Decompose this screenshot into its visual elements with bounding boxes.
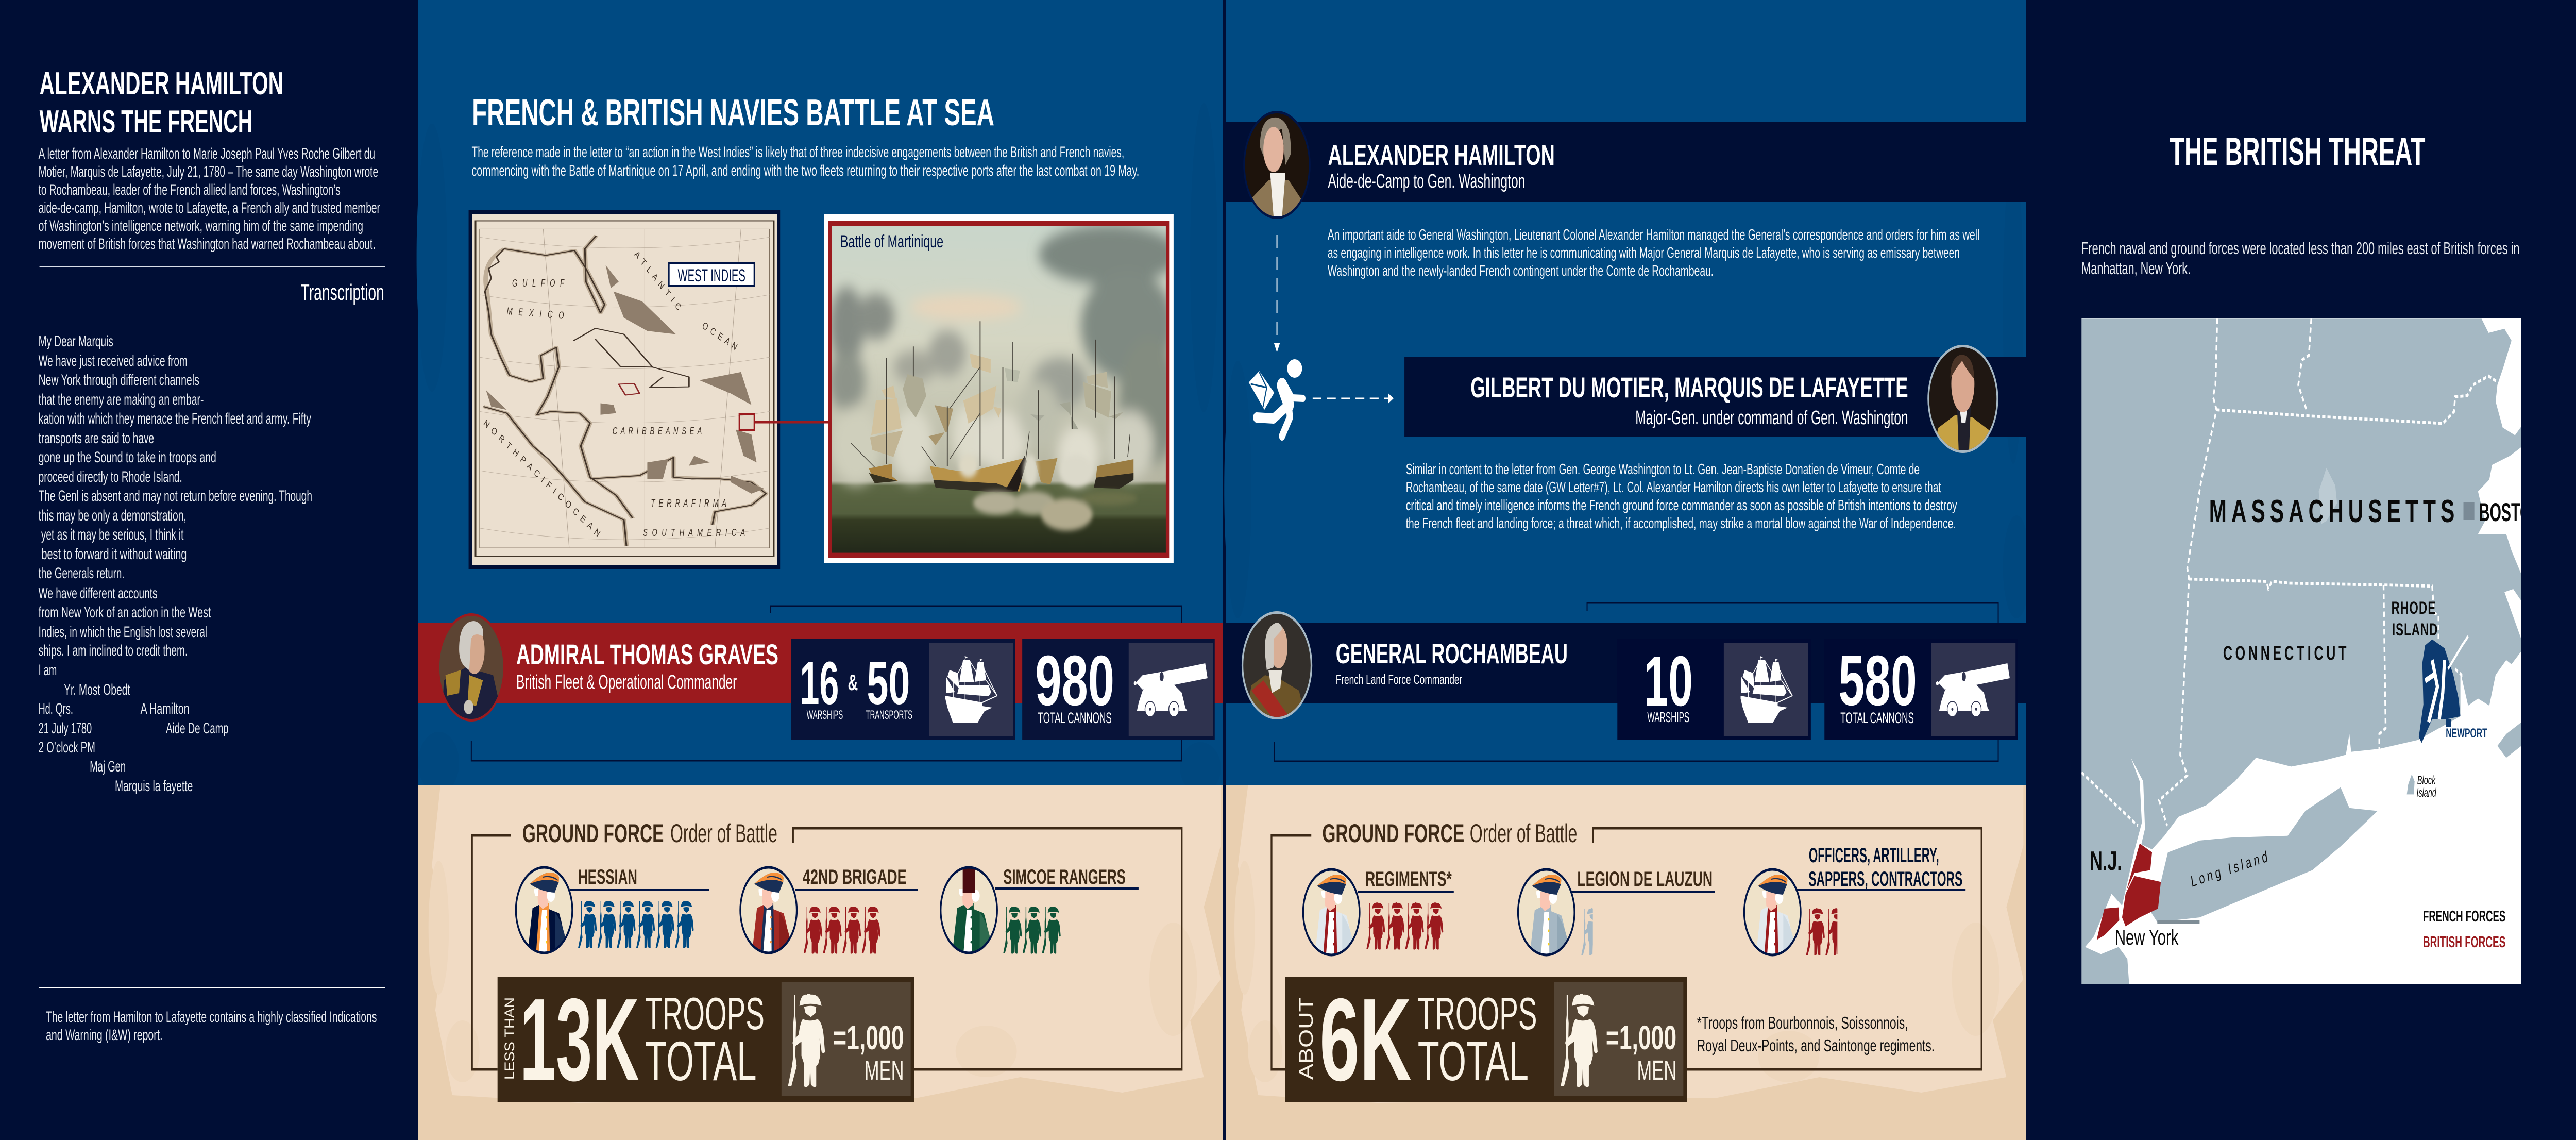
- total troops box: TROOPS: [1418, 988, 1537, 1039]
- total troops box: 6K: [1319, 974, 1412, 1105]
- antique map of the West Indies: S O U T H A M E R I C A: [643, 527, 745, 539]
- unit: Hessian: [516, 866, 709, 954]
- name: GENERAL ROCHAMBEAU: [1336, 638, 1568, 669]
- stat: warships and transports: 16: [800, 649, 839, 717]
- letter transcription: Yr. Most Obedt: [64, 681, 130, 698]
- intro text: The reference made in the letter to “an action in the West Indies” is likely that of three indecisive engagements between the British and French navies,: [472, 144, 1124, 161]
- letter transcription: best to forward it without waiting: [42, 546, 187, 563]
- panel: the British threat: [2026, 0, 2576, 1140]
- Lafayette description: Rochambeau, of the same date (GW Letter#7), Lt. Col. Alexander Hamilton directs his own letter to Lafayette to ensure that: [1406, 479, 1941, 496]
- intro text: movement of British forces that Washington had warned Rochambeau about.: [39, 236, 376, 253]
- painting: Battle of Martinique: [824, 214, 1179, 563]
- arrow: courier to Lafayette: [1313, 393, 1394, 404]
- I&W note: and Warning (I&W) report.: [46, 1027, 163, 1044]
- letter transcription: the Generals return.: [39, 565, 125, 582]
- center divider: [1223, 0, 1226, 1140]
- arrow: down to courier: [1274, 235, 1280, 353]
- stat: warships and transports: WARSHIPS: [807, 709, 843, 722]
- icon: officer uniform: [1744, 869, 1801, 957]
- state borders: [2081, 318, 2497, 826]
- stat: total cannons: TOTAL CANNONS: [1038, 710, 1112, 727]
- intro text: [472, 144, 1139, 179]
- map: New England: BOSTON: [2479, 498, 2542, 527]
- intro text: Motier, Marquis de Lafayette, July 21, 1780 – The same day Washington wrote: [39, 163, 378, 180]
- unit: 42nd Brigade: 42ND BRIGADE: [803, 866, 907, 888]
- intro text: of Washington’s intelligence network, warning him of the same impending: [39, 217, 363, 234]
- intro text: aide-de-camp, Hamilton, wrote to Lafayette, a French ally and trusted member: [39, 199, 380, 216]
- name: ALEXANDER HAMILTON: [1328, 139, 1555, 172]
- Hamilton description: Washington and the newly-landed French contingent under the Comte de Rochambeau.: [1328, 263, 1714, 279]
- Hamilton description: as engaging in intelligence work. In this letter he is communicating with Major General Marquis de Lafayette, who is serving as emissary between: [1328, 245, 1960, 261]
- unit: Legion de Lauzun: [1518, 868, 1715, 957]
- transcription heading: Transcription: [300, 279, 384, 305]
- map: New England: NEWPORT: [2446, 727, 2487, 741]
- panel: the messengers and French forces: [1224, 0, 2030, 785]
- panel heading: FRENCH & BRITISH NAVIES BATTLE AT SEA: [472, 92, 994, 133]
- stat: total cannons: [1824, 639, 2018, 740]
- ground force heading: Order of Battle: [670, 819, 777, 848]
- antique map of the West Indies: O C E A N: [701, 320, 738, 353]
- antique map of the West Indies: T E R R A F I R M A: [651, 497, 726, 509]
- letter transcription: A Hamilton: [141, 700, 190, 717]
- heading: [40, 66, 283, 140]
- icon: Hessian uniform: [516, 867, 572, 954]
- total troops box: LESS THAN: [502, 997, 517, 1080]
- letter transcription: We have different accounts: [39, 585, 158, 602]
- role: British Fleet & Operational Commander: [516, 671, 737, 693]
- intro text: to Rochambeau, leader of the French allied land forces, Washington’s: [39, 181, 341, 198]
- legend: FRENCH FORCES: [2423, 907, 2505, 925]
- banner: Admiral Thomas Graves: [418, 613, 1223, 722]
- map: New England: Block: [2417, 774, 2436, 787]
- map: New England: Long Island: [2190, 848, 2268, 891]
- Lafayette description: the French fleet and landing force; a threat which, if accomplished, may strike a mortal blow against the War of Independence.: [1406, 515, 1956, 532]
- total troops box: =1,000: [833, 1018, 904, 1057]
- frame bracket: [471, 606, 1182, 761]
- ships: [870, 354, 1123, 457]
- icon: regiment uniform: [1303, 869, 1360, 957]
- letter transcription: Marquis la fayette: [115, 778, 193, 795]
- map: New England: New York: [2115, 925, 2179, 949]
- unit: Regiments: REGIMENTS*: [1365, 868, 1452, 891]
- unit: officers, artillery, sappers, contractors: OFFICERS, ARTILLERY,: [1809, 844, 1939, 867]
- role: French Land Force Commander: [1336, 672, 1462, 687]
- intro text: commencing with the Battle of Martinique on 17 April, and ending with the two fleets returning to their respective ports after the last combat on 19 May.: [472, 162, 1139, 179]
- icon: ship: [945, 656, 997, 723]
- regiments footnote: [1697, 1013, 1935, 1055]
- legend: BRITISH FORCES: [2423, 933, 2505, 951]
- painting caption: Battle of Martinique: [840, 232, 943, 252]
- total troops box: [498, 974, 914, 1105]
- Lafayette description: [1406, 461, 1957, 532]
- letter transcription: this may be only a demonstration,: [39, 507, 187, 524]
- intro text: A letter from Alexander Hamilton to Marie Joseph Paul Yves Roche Gilbert du: [39, 145, 375, 162]
- map labels: N.J.: [2090, 846, 2122, 876]
- heading: WARNS THE FRENCH: [40, 104, 252, 140]
- letter transcription: The Genl is absent and may not return before evening. Though: [39, 488, 312, 505]
- letter transcription: My Dear Marquis: [39, 333, 113, 350]
- letter transcription: proceed directly to Rhode Island.: [39, 468, 182, 485]
- icon: Simcoe Rangers uniform: [941, 866, 997, 954]
- panel: French ground force: [1226, 785, 2026, 1140]
- banner: Lafayette: [1404, 345, 2026, 454]
- letter transcription: New York through different channels: [39, 372, 199, 389]
- unit: officers, artillery, sappers, contractors: SAPPERS, CONTRACTORS: [1808, 868, 1962, 891]
- banner: General Rochambeau: [1226, 611, 2026, 722]
- total troops box: MEN: [1637, 1055, 1676, 1086]
- I&W note: [46, 1009, 377, 1044]
- icon: running courier with letters: [1249, 359, 1303, 436]
- panel: British ground force: [418, 785, 1223, 1140]
- map labels: RHODE: [2392, 598, 2435, 618]
- I&W note: The letter from Hamilton to Lafayette contains a highly classified Indications: [46, 1009, 377, 1026]
- unit: Legion de Lauzun: LEGION DE LAUZUN: [1577, 868, 1713, 891]
- panel: French & British navies battle at sea: [417, 0, 1223, 794]
- Lafayette description: critical and timely intelligence informs the French ground force commander as soon as possible of British intentions to destroy: [1406, 497, 1957, 514]
- antique map of the West Indies: N O R T H P A C I F I C O C E A N: [482, 417, 601, 540]
- Rhode Island: French forces: [2419, 636, 2468, 743]
- antique map of the West Indies: A T L A N T I C: [633, 248, 683, 313]
- frame bracket: [1274, 603, 1998, 761]
- antique map of the West Indies: G U L F O F: [512, 277, 565, 289]
- regiments footnote: Royal Deux-Points, and Saintonge regiments.: [1697, 1036, 1935, 1055]
- regiments footnote: *Troops from Bourbonnois, Soissonnois,: [1697, 1013, 1908, 1032]
- total troops box: TOTAL: [645, 1030, 757, 1093]
- letter transcription: transports are said to have: [39, 430, 154, 447]
- description: Manhattan, New York.: [2081, 259, 2191, 278]
- Hamilton description: An important aide to General Washington, Lieutenant Colonel Alexander Hamilton managed the General’s correspondence and orders for him as well: [1328, 227, 1979, 243]
- role: Aide-de-Camp to Gen. Washington: [1328, 170, 1525, 192]
- stat: warships and transports: &: [848, 669, 858, 695]
- unit: officers, artillery, sappers, contractors: [1744, 844, 1965, 957]
- letter transcription: Aide De Camp: [166, 720, 229, 737]
- total troops box: [1285, 974, 1687, 1105]
- description: French naval and ground forces were located less than 200 miles east of British forces in: [2081, 239, 2519, 258]
- stat: total cannons: 580: [1838, 641, 1917, 720]
- heading: THE BRITISH THREAT: [2170, 130, 2426, 174]
- portrait: Rochambeau: [1242, 611, 1312, 722]
- map labels: MASSACHUSETTS: [2209, 494, 2454, 529]
- portrait: Hamilton: [1243, 111, 1311, 219]
- total troops box: 13K: [520, 974, 639, 1105]
- unit: Simcoe Rangers: SIMCOE RANGERS: [1003, 866, 1126, 888]
- stat: warships and transports: 50: [867, 649, 910, 717]
- map labels: ISLAND: [2392, 620, 2437, 640]
- letter transcription: 21 July 1780: [39, 720, 92, 737]
- letter transcription: 2 O’clock PM: [39, 739, 95, 756]
- letter transcription: Hd. Qrs.: [39, 700, 73, 717]
- stat: warships: WARSHIPS: [1647, 710, 1689, 726]
- ground force heading: GROUND FORCE: [1322, 819, 1464, 848]
- letter transcription: [39, 333, 312, 795]
- total troops box: MEN: [865, 1055, 904, 1086]
- total troops box: TROOPS: [645, 988, 765, 1039]
- unit: Hessian: HESSIAN: [578, 866, 637, 888]
- letter transcription: that the enemy are making an embar-: [39, 391, 204, 408]
- stat: warships and transports: TRANSPORTS: [866, 709, 912, 722]
- letter transcription: Maj Gen: [90, 758, 126, 775]
- letter transcription: gone up the Sound to take in troops and: [39, 449, 216, 466]
- stat: total cannons: [1022, 639, 1215, 740]
- letter transcription: Indies, in which the English lost several: [39, 624, 207, 641]
- New York region: British forces: [2097, 844, 2161, 940]
- name: ADMIRAL THOMAS GRAVES: [516, 639, 778, 671]
- letter transcription: ships. I am inclined to credit them.: [39, 642, 188, 659]
- Lafayette description: Similar in content to the letter from Gen. George Washington to Lt. Gen. Jean-Baptiste Donatien de Vimeur, Comte de: [1406, 461, 1920, 478]
- letter transcription: kation with which they menace the French fleet and army. Fifty: [39, 410, 311, 427]
- connector from map to painting: [739, 414, 828, 430]
- stat: total cannons: TOTAL CANNONS: [1840, 710, 1914, 727]
- unit: 42nd Brigade: [740, 866, 918, 954]
- icon: soldier equals 1,000 men: [1561, 994, 1598, 1087]
- West Indies label: WEST INDIES: [678, 266, 745, 286]
- panel: Alexander Hamilton warns the French: [39, 66, 385, 1044]
- map: New England: Island: [2416, 786, 2436, 800]
- map: New England: [2081, 318, 2542, 984]
- description: [2081, 239, 2519, 278]
- ground force heading: GROUND FORCE: [522, 819, 664, 848]
- name: GILBERT DU MOTIER, MARQUIS DE LAFAYETTE: [1470, 372, 1908, 404]
- banner: Alexander Hamilton: [1226, 111, 2026, 219]
- portrait: Lafayette: [1927, 345, 1998, 454]
- letter transcription: We have just received advice from: [39, 353, 188, 370]
- total troops box: ABOUT: [1295, 997, 1317, 1080]
- role: Major-Gen. under command of Gen. Washington: [1635, 407, 1908, 428]
- map labels: [2090, 494, 2454, 876]
- ground force heading: [1322, 819, 1577, 848]
- stat: warships: 10: [1644, 641, 1693, 721]
- stat: total cannons: 980: [1035, 641, 1114, 720]
- unit: Regiments: [1303, 868, 1454, 957]
- heading: ALEXANDER HAMILTON: [40, 66, 283, 102]
- legend: [2423, 907, 2505, 951]
- letter transcription: I am: [39, 662, 57, 679]
- stat: warships: [1617, 639, 1811, 740]
- antique map of the West Indies: [469, 210, 780, 569]
- total troops box: =1,000: [1606, 1018, 1676, 1057]
- icon: ship: [1741, 656, 1792, 723]
- Hamilton description: [1328, 227, 1979, 279]
- land: [2081, 318, 2521, 984]
- total troops box: TOTAL: [1418, 1030, 1529, 1093]
- ground force heading: Order of Battle: [1470, 819, 1577, 848]
- ground force heading: [522, 819, 777, 848]
- icon: 42nd Brigade uniform: [740, 867, 797, 954]
- map labels: CONNECTICUT: [2223, 642, 2347, 664]
- icon: soldier equals 1,000 men: [788, 994, 825, 1087]
- letter transcription: from New York of an action in the West: [39, 604, 211, 621]
- portrait: Graves: [439, 613, 503, 722]
- stat: warships and transports: [791, 639, 1015, 740]
- icon: cannon: [1134, 663, 1208, 717]
- antique map of the West Indies: C A R I B B E A N S E A: [613, 425, 702, 437]
- icon: Lauzun uniform: [1518, 869, 1574, 957]
- letter transcription: yet as it may be serious, I think it: [41, 526, 183, 543]
- unit: Simcoe Rangers: [941, 866, 1139, 954]
- antique map of the West Indies: M E X I C O: [506, 305, 564, 322]
- icon: cannon: [1936, 663, 2010, 717]
- intro text: [39, 145, 380, 253]
